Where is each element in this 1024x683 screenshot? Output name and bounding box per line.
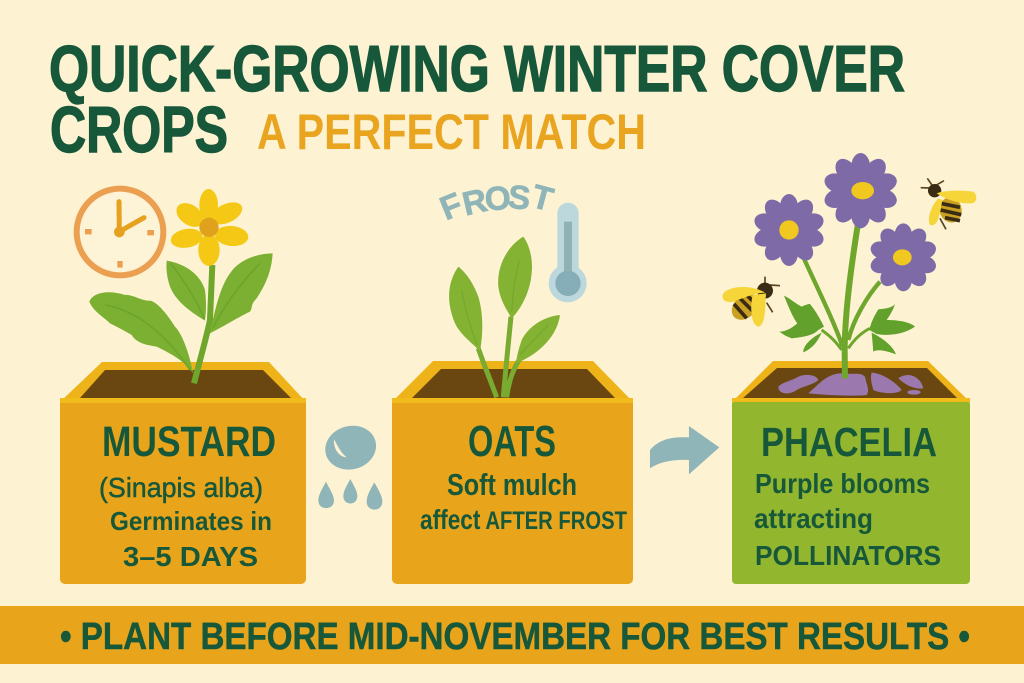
icon: thermometer	[549, 203, 587, 302]
panel text: phacelia: Purple blooms	[755, 468, 930, 499]
panel text: oats: OATS	[468, 417, 556, 466]
label: frost	[435, 178, 557, 228]
panel text: oats: affect AFTER FROST	[420, 504, 627, 535]
title	[49, 32, 905, 166]
flower: top	[822, 153, 899, 228]
panel text: mustard: MUSTARD	[102, 418, 276, 466]
panel text: mustard: 3–5 DAYS	[123, 541, 258, 572]
panel text: mustard: Germinates in	[110, 506, 272, 536]
panel text: oats	[420, 417, 627, 535]
icon: phacelia plant	[722, 153, 976, 396]
panel text: oats: Soft mulch	[447, 467, 577, 502]
icon: water drops	[318, 420, 382, 510]
label: frost: T	[528, 178, 557, 219]
label: frost: F	[435, 186, 468, 228]
icon: bee left	[722, 277, 780, 327]
panel text: mustard	[99, 418, 276, 572]
panel text: phacelia: POLLINATORS	[755, 540, 941, 571]
subtitle: A PERFECT MATCH	[257, 104, 646, 160]
panel text: phacelia: PHACELIA	[761, 419, 937, 465]
footer banner	[0, 606, 1024, 664]
label: frost: S	[506, 179, 532, 218]
panel: oats	[392, 361, 633, 584]
icon: bee right	[921, 178, 976, 229]
panel: phacelia	[732, 361, 970, 584]
icon: mustard plant	[89, 189, 273, 383]
panel: mustard	[60, 362, 306, 584]
label: frost: O	[484, 180, 512, 218]
flower: left	[752, 194, 826, 266]
label: frost: R	[459, 182, 491, 224]
icon: clock	[77, 189, 163, 275]
title: CROPS	[50, 93, 228, 166]
panel text: phacelia	[754, 419, 941, 571]
icon: oat plant	[449, 237, 560, 397]
panel text: mustard: (Sinapis alba)	[99, 472, 263, 503]
flower: right	[868, 223, 938, 291]
panel text: phacelia: attracting	[754, 503, 873, 534]
arrow	[650, 426, 719, 474]
